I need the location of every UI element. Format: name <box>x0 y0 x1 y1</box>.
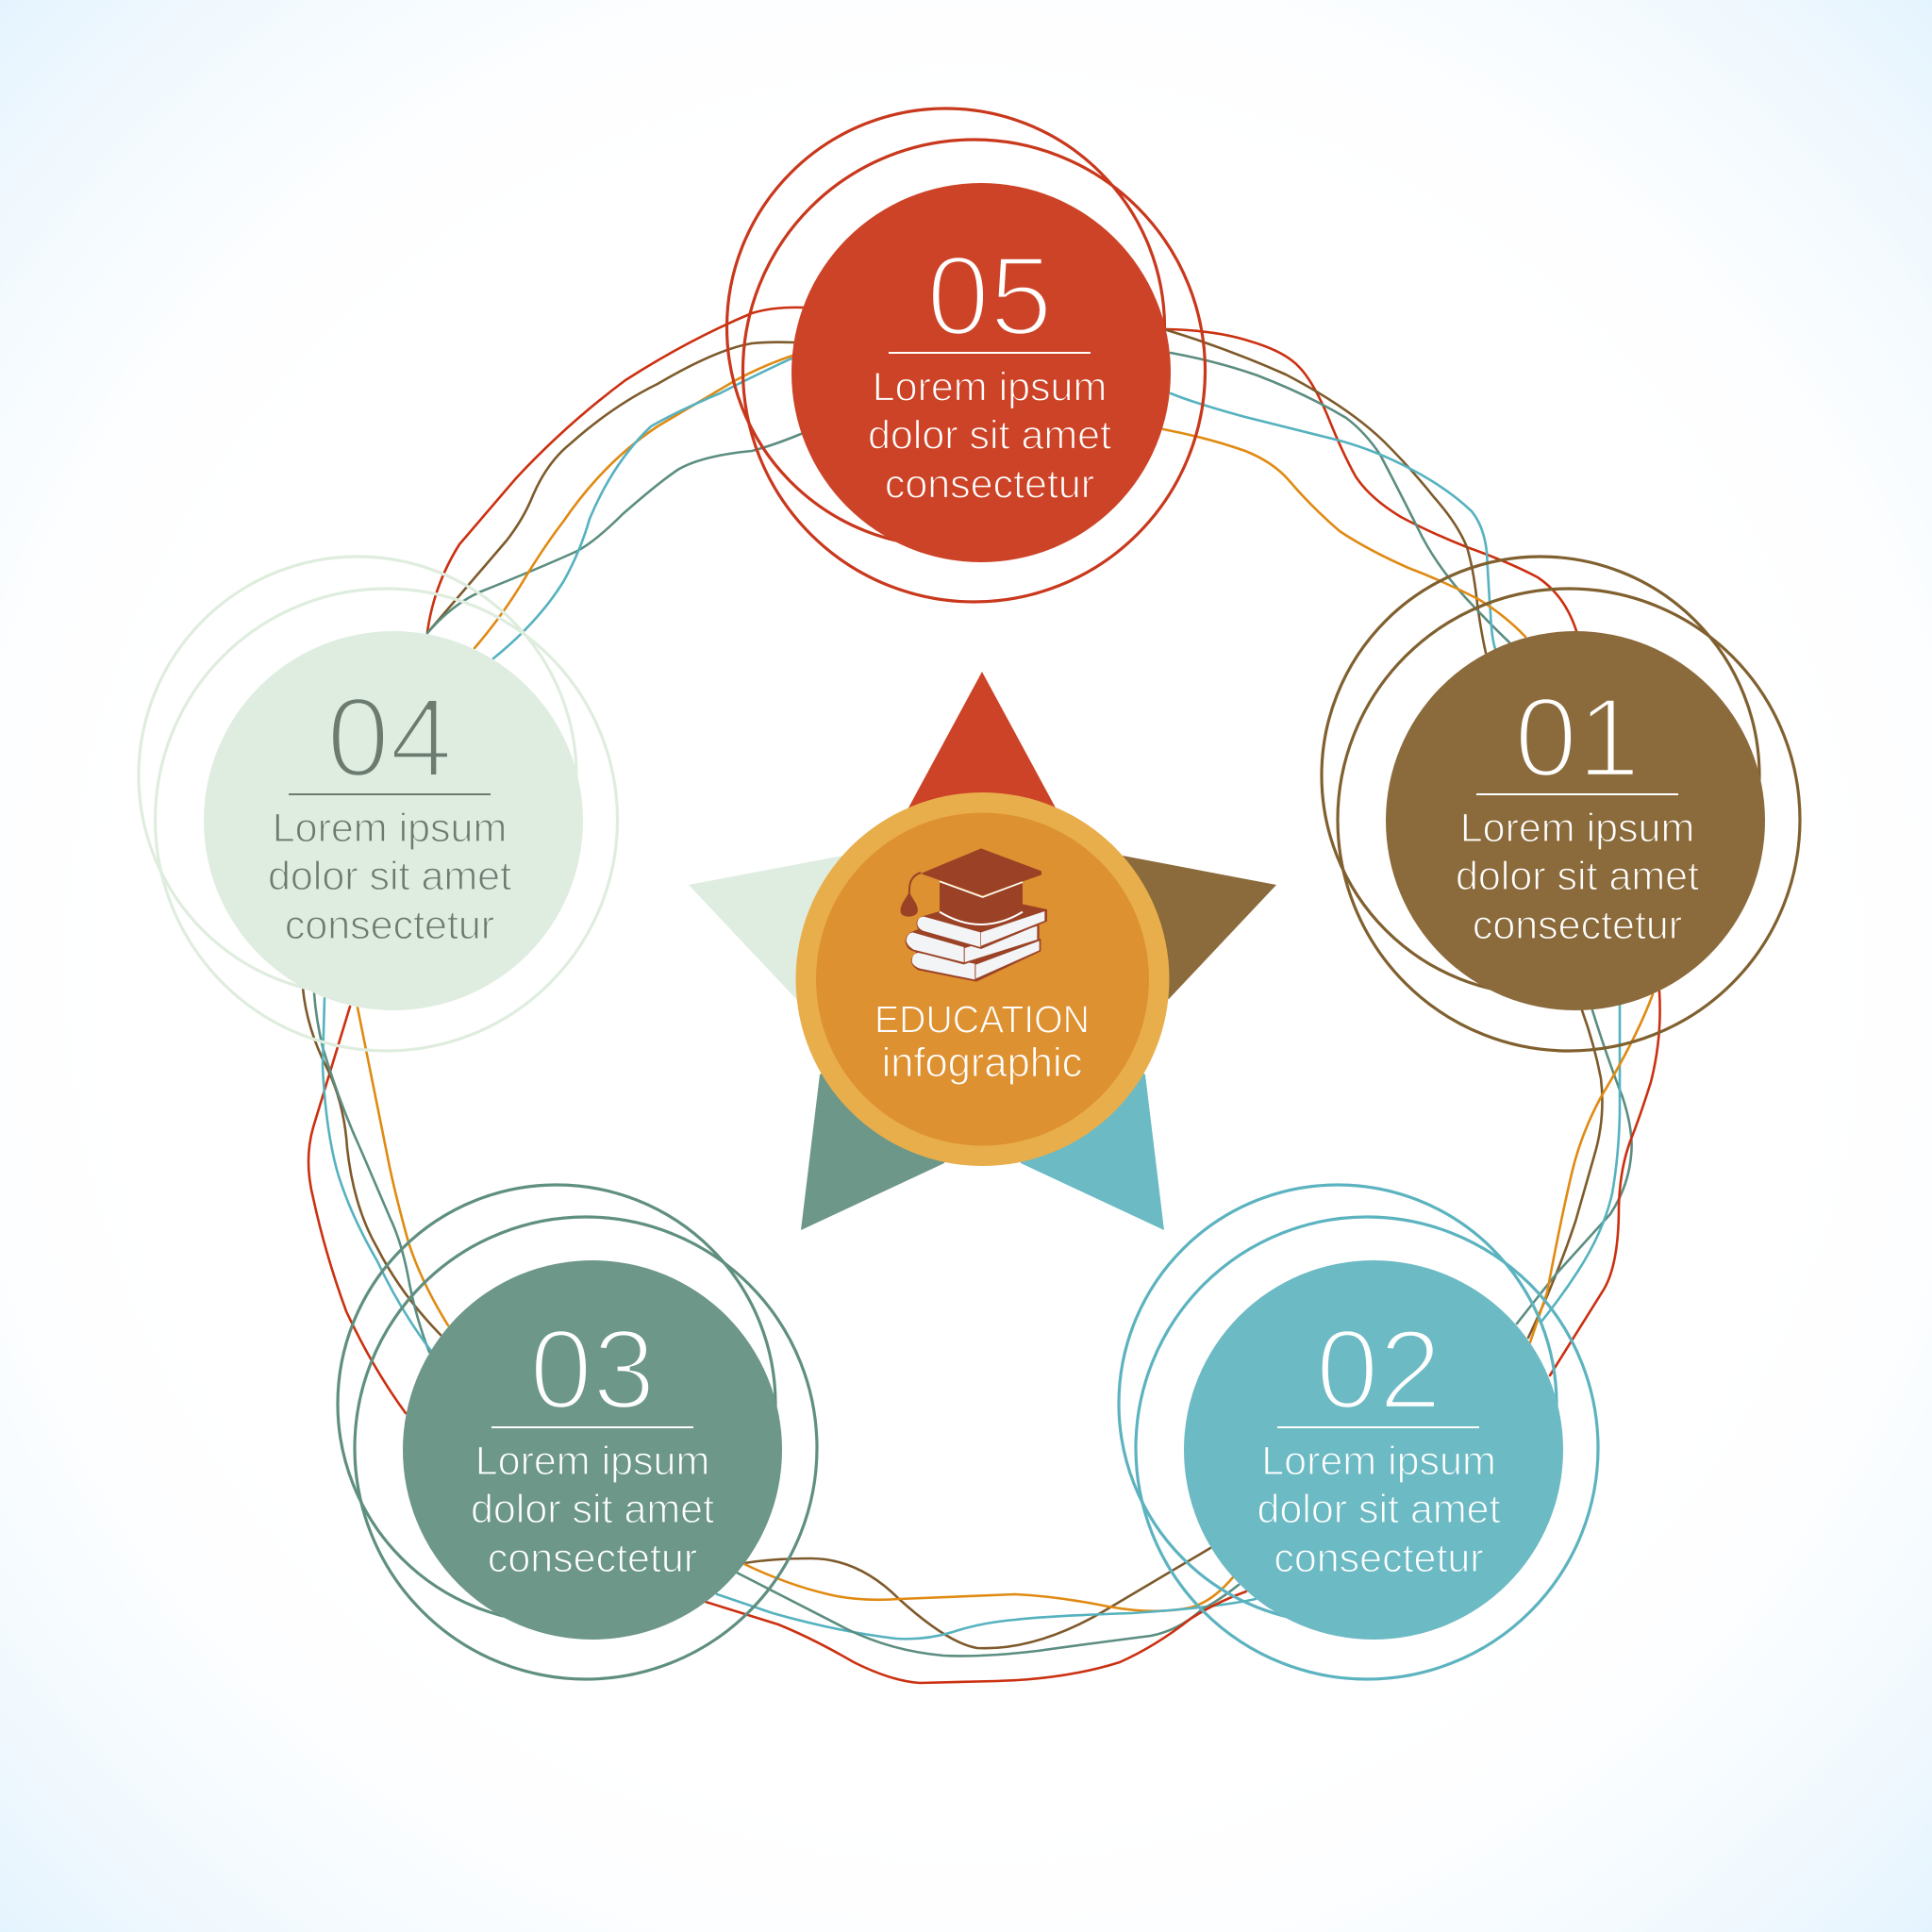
text 02: dolor sit amet <box>1257 1487 1501 1532</box>
text 01 <box>1456 806 1699 948</box>
number 02: 02 <box>1316 1307 1441 1433</box>
rings 03 <box>338 1185 817 1679</box>
disc 02 <box>1184 1260 1563 1640</box>
number 04: 04 <box>326 675 453 801</box>
text 03 <box>471 1439 714 1581</box>
badge inner disc <box>816 813 1149 1145</box>
badge subtitle: infographic <box>882 1041 1082 1086</box>
text 04: dolor sit amet <box>268 854 511 899</box>
node 05 <box>726 108 1206 602</box>
disc 04 <box>204 631 583 1010</box>
badge title: EDUCATION <box>874 998 1090 1041</box>
text 05: Lorem ipsum <box>873 364 1107 409</box>
text 04 <box>268 806 511 948</box>
rule 03 <box>491 1426 693 1428</box>
text 02: Lorem ipsum <box>1261 1439 1496 1484</box>
text 03: consectetur <box>488 1536 697 1581</box>
number 03: 03 <box>529 1307 656 1433</box>
rule 02 <box>1277 1426 1479 1428</box>
rings 04 <box>139 557 617 1051</box>
text 04: Lorem ipsum <box>273 806 507 851</box>
text 02 <box>1257 1439 1501 1581</box>
rule 05 <box>889 352 1091 354</box>
text 05 <box>868 364 1111 508</box>
number 05: 05 <box>926 233 1053 359</box>
rings 02 <box>1119 1185 1598 1679</box>
text 03: Lorem ipsum <box>475 1439 709 1484</box>
connector waves from 02 to 03 <box>706 1548 1256 1683</box>
text 05: dolor sit amet <box>868 413 1111 458</box>
disc 01 <box>1386 631 1765 1010</box>
text 04: consectetur <box>285 903 494 948</box>
text 01: Lorem ipsum <box>1460 806 1694 851</box>
badge outer ring <box>796 792 1170 1166</box>
text 05: consectetur <box>885 462 1094 508</box>
connector waves from 05 to 01 <box>1163 329 1577 653</box>
rule 01 <box>1476 793 1678 795</box>
disc 03 <box>403 1260 782 1640</box>
node 04 <box>139 557 617 1051</box>
rings 05 <box>726 108 1206 602</box>
node 03 <box>338 1185 817 1679</box>
disc 05 <box>791 183 1171 562</box>
node 01 <box>1322 557 1800 1051</box>
text 02: consectetur <box>1274 1536 1484 1581</box>
connector waves from 03 to 04 <box>303 988 448 1413</box>
text 01: consectetur <box>1473 903 1682 948</box>
rule 04 <box>289 793 491 795</box>
text 03: dolor sit amet <box>471 1487 714 1532</box>
connector waves from 04 to 05 <box>427 308 803 658</box>
number 01: 01 <box>1514 675 1641 801</box>
node 02 <box>1119 1185 1598 1679</box>
rings 01 <box>1322 557 1800 1051</box>
text 01: dolor sit amet <box>1456 854 1699 899</box>
central star <box>689 672 1276 1230</box>
icon: graduation cap on books <box>901 848 1047 982</box>
connector waves from 01 to 02 <box>1517 991 1660 1375</box>
central badge <box>796 792 1170 1166</box>
